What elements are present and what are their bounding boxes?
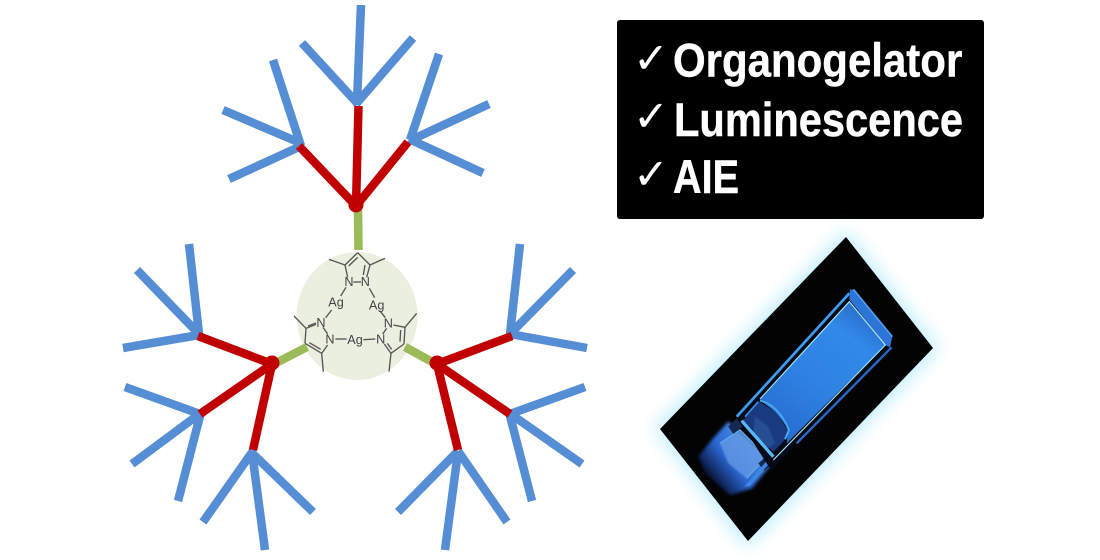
item: Organogelator: Organogelator <box>673 35 962 87</box>
cuvette <box>698 288 892 495</box>
core: silver pyrazolate complex <box>294 252 418 380</box>
item: AIE: AIE <box>673 152 739 204</box>
item: Luminescence: Luminescence <box>674 95 963 147</box>
highlight on the upper wall <box>737 293 849 417</box>
cyan glow <box>660 237 933 541</box>
solution edge highlights <box>760 302 885 460</box>
molecular structure: N <box>376 333 385 347</box>
molecular structure: Ag <box>347 333 363 347</box>
item: Luminescence: ✓ <box>633 92 669 142</box>
photo: glowing cuvette under UV light <box>660 237 933 541</box>
molecular structure: N <box>361 275 370 289</box>
molecular structure <box>294 253 417 372</box>
item: Organogelator: ✓ <box>633 34 669 84</box>
molecular structure: N <box>325 332 335 346</box>
checklist background <box>617 20 984 219</box>
item: AIE: ✓ <box>633 150 669 200</box>
molecular structure: N <box>344 275 354 289</box>
right linker <box>405 347 436 364</box>
dark gap inside the wall <box>737 288 892 470</box>
left generation 2 blue arms <box>123 244 313 550</box>
panel: property checklist <box>617 20 984 219</box>
right generation 1 red arms <box>430 336 512 450</box>
dendron: left branch <box>123 244 313 550</box>
neck and meniscus <box>742 401 789 457</box>
top linker <box>354 210 363 250</box>
cuvette cap <box>698 418 773 495</box>
luminescent solution <box>760 302 885 443</box>
right generation 2 blue arms <box>398 244 587 550</box>
top end band <box>849 289 892 347</box>
black photo background <box>660 237 933 541</box>
dendron: top branch <box>223 5 489 250</box>
molecular structure: Ag <box>328 296 344 310</box>
molecular structure: N <box>316 316 326 330</box>
item: AIE <box>633 150 739 204</box>
left generation 1 red arms <box>198 336 280 450</box>
molecular structure: Ag <box>369 298 384 312</box>
top generation 2 blue arms <box>223 5 489 179</box>
top generation 1 red arms <box>299 106 408 212</box>
molecular structure: N <box>384 317 393 331</box>
core background circle <box>296 252 418 380</box>
left linker <box>274 347 307 364</box>
dendron: right branch <box>398 244 587 550</box>
